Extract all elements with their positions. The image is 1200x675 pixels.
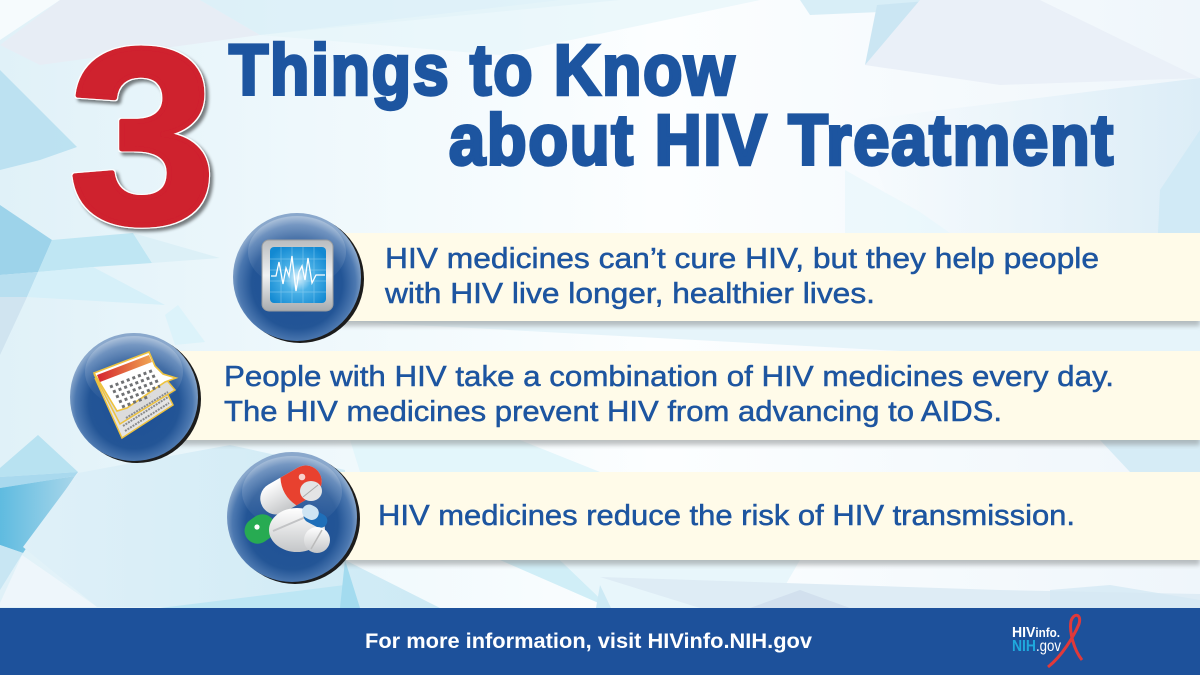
- logo: HIVinfo.NIH.gov with red ribbon: [1012, 615, 1082, 667]
- white tablet: [269, 508, 325, 552]
- white and red capsule: [254, 460, 328, 520]
- logo: HIVinfo.NIH.gov with red ribbon: HIVinfo.: [1012, 624, 1060, 641]
- footer bar: [0, 608, 1200, 675]
- fact 2 text: [224, 361, 1114, 428]
- fact 2 text: People with HIV take a combination of HIV medicines every day.: [224, 361, 1114, 393]
- icon: calendar: [70, 333, 201, 463]
- back pages: [95, 378, 173, 438]
- fact 2 text: The HIV medicines prevent HIV from advancing to AIDS.: [224, 396, 1002, 428]
- icon: pills: [227, 452, 360, 584]
- fact 3 text: HIV medicines reduce the risk of HIV transmission.: [378, 500, 1075, 532]
- fact 1 text: HIV medicines can’t cure HIV, but they help people: [385, 243, 1099, 275]
- title line 2: about HIV Treatment: [449, 102, 1115, 180]
- panel: fact 2: [70, 333, 1200, 463]
- green capsule: [239, 509, 281, 549]
- white pill on red capsule: [299, 474, 322, 501]
- footer text: For more information, visit HIVinfo.NIH.gov: [365, 630, 812, 653]
- title line 1: Things to Know: [229, 32, 736, 110]
- top page: [94, 352, 176, 411]
- fact 1 text: [384, 243, 1099, 310]
- fact 1 text: with HIV live longer, healthier lives.: [384, 278, 875, 310]
- big red number 3: 3: [69, 0, 216, 276]
- logo: HIVinfo.NIH.gov with red ribbon: .gov: [1036, 638, 1061, 655]
- panel: fact 3: [227, 452, 1200, 584]
- banner 2: [175, 351, 1200, 445]
- panel: fact 1: [233, 213, 1200, 343]
- blue capsule: [300, 502, 330, 530]
- banner 1: [340, 233, 1200, 326]
- small white pill: [304, 527, 330, 553]
- icon: heart monitor: [233, 213, 364, 343]
- banner 3: [340, 472, 1200, 565]
- logo: HIVinfo.NIH.gov with red ribbon: NIH: [1012, 638, 1036, 655]
- title: [229, 32, 1115, 180]
